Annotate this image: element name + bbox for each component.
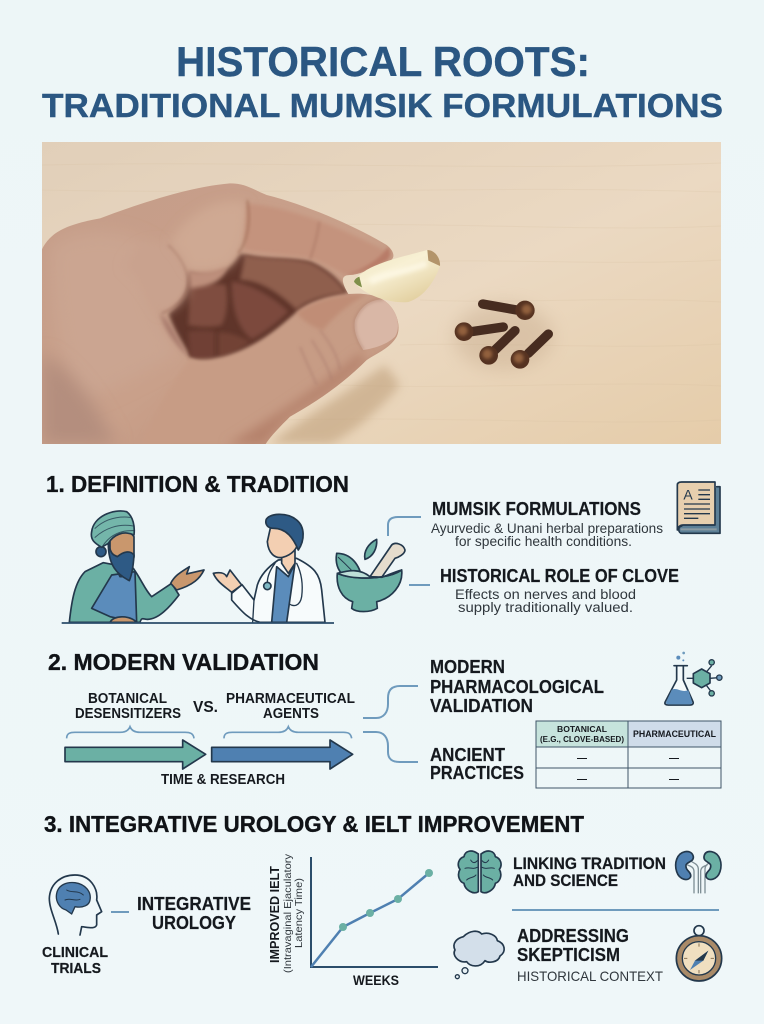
label: clinical trials: CLINICAL (42, 945, 108, 961)
section 1: definition and tradition (46, 471, 720, 623)
comparison diagram: botanical versus pharmaceutical: AGENTS (263, 706, 319, 722)
text: addressing skepticism (517, 926, 663, 984)
text: ancient practices: ANCIENT (430, 745, 505, 765)
hand shadow (270, 365, 400, 444)
label: integrative urology (137, 894, 251, 933)
text: modern pharmacological validation: MODERN (430, 657, 505, 677)
comparison table (536, 721, 721, 788)
text: ancient practices (430, 745, 524, 783)
label: clinical trials (42, 945, 108, 977)
icon: flask and molecule (665, 652, 722, 705)
comparison diagram: botanical versus pharmaceutical: BOTANICAL (88, 691, 167, 707)
title (42, 38, 723, 124)
label: integrative urology: INTEGRATIVE (137, 894, 251, 914)
icon: book: A (683, 486, 693, 502)
fold of the palm (168, 275, 193, 316)
line chart: improved IELT over weeks: WEEKS (353, 973, 399, 988)
hand (42, 183, 399, 445)
text: modern pharmacological validation (430, 657, 604, 716)
comparison diagram: botanical versus pharmaceutical: PHARMACEUTICAL (226, 691, 355, 707)
comparison table: — (577, 753, 587, 764)
comparison table: — (669, 774, 679, 785)
text: modern pharmacological validation: PHARMACOLOGICAL (430, 677, 604, 697)
text: linking tradition and science: LINKING TRADITION (513, 855, 666, 873)
comparison table: PHARMACEUTICAL (633, 729, 716, 739)
icon: thought cloud (454, 931, 504, 979)
text: mumsik formulations (431, 499, 663, 549)
section 1 heading: 1. DEFINITION & TRADITION (46, 471, 349, 497)
section 3: integrative urology and IELT improvement (42, 811, 722, 988)
garlic clove (354, 250, 440, 302)
ground line (62, 620, 334, 625)
title: TRADITIONAL MUMSIK FORMULATIONS (42, 87, 723, 124)
connector lines to modern and ancient labels (363, 686, 418, 762)
line chart: improved IELT over weeks: Latency Time) (293, 878, 305, 948)
text: mumsik formulations: for specific health conditions. (455, 534, 632, 549)
comparison diagram: botanical versus pharmaceutical: DESENSITIZERS (75, 706, 181, 722)
icon: brain (458, 851, 501, 893)
section 2: modern validation (48, 649, 722, 788)
icon: compass (676, 926, 722, 981)
icon: head with brain (49, 875, 102, 935)
text: addressing skepticism: ADDRESSING (517, 926, 629, 946)
dark palm (168, 253, 348, 361)
comparison diagram: botanical versus pharmaceutical: TIME & RESEARCH (161, 772, 285, 788)
text: mumsik formulations: MUMSIK FORMULATIONS (432, 499, 641, 519)
section 2 heading: 2. MODERN VALIDATION (48, 649, 319, 675)
icon: kidneys (676, 852, 721, 893)
comparison diagram: botanical versus pharmaceutical: VS. (193, 699, 218, 716)
divider (512, 909, 719, 911)
mortar connector lines (388, 517, 430, 585)
comparison table: (E.G., CLOVE-BASED) (540, 734, 624, 744)
lit back of hand (70, 258, 71, 259)
icon: mortar and pestle with leaves (336, 539, 405, 612)
label: integrative urology: UROLOGY (152, 913, 236, 933)
line chart: improved IELT over weeks (268, 853, 438, 988)
index finger knuckle (170, 201, 247, 271)
comparison table: BOTANICAL (557, 724, 607, 734)
text: historical role of clove: Effects on nerves and blood (455, 587, 636, 602)
doctor figure (213, 514, 325, 622)
connector line (111, 911, 129, 913)
icon: book (677, 482, 720, 533)
text: mumsik formulations: Ayurvedic & Unani herbal preparations (431, 521, 663, 536)
dried cloves (453, 301, 553, 370)
arrow: pharmaceutical (212, 740, 353, 769)
title: HISTORICAL ROOTS: (176, 38, 590, 85)
text: addressing skepticism: HISTORICAL CONTEXT (517, 968, 663, 984)
text: modern pharmacological validation: VALIDATION (430, 696, 533, 716)
thumb (190, 293, 377, 364)
text: linking tradition and science: AND SCIENCE (513, 872, 618, 890)
text: historical role of clove: supply traditionally valued. (458, 600, 633, 615)
line chart: improved IELT over weeks: (Intravaginal Ejaculatory (282, 853, 294, 973)
comparison diagram: botanical versus pharmaceutical (65, 691, 355, 788)
comparison table: — (577, 774, 587, 785)
label: clinical trials: TRIALS (51, 961, 101, 977)
arrow: botanical (65, 740, 206, 769)
text: historical role of clove (440, 566, 679, 615)
photo: hand holding garlic clove beside cloves on a wooden surface (42, 142, 721, 445)
section 3 heading: 3. INTEGRATIVE UROLOGY & IELT IMPROVEMENT (44, 811, 584, 837)
comparison table: — (669, 753, 679, 764)
text: historical role of clove: HISTORICAL ROLE OF CLOVE (440, 566, 679, 586)
healer figure (69, 511, 204, 622)
text: ancient practices: PRACTICES (430, 763, 524, 783)
illustration: traditional healer and doctor (62, 511, 334, 623)
line chart: improved IELT over weeks: IMPROVED IELT (268, 866, 282, 963)
thumbnail (355, 299, 398, 350)
text: addressing skepticism: SKEPTICISM (517, 945, 620, 965)
text: linking tradition and science (513, 855, 666, 890)
